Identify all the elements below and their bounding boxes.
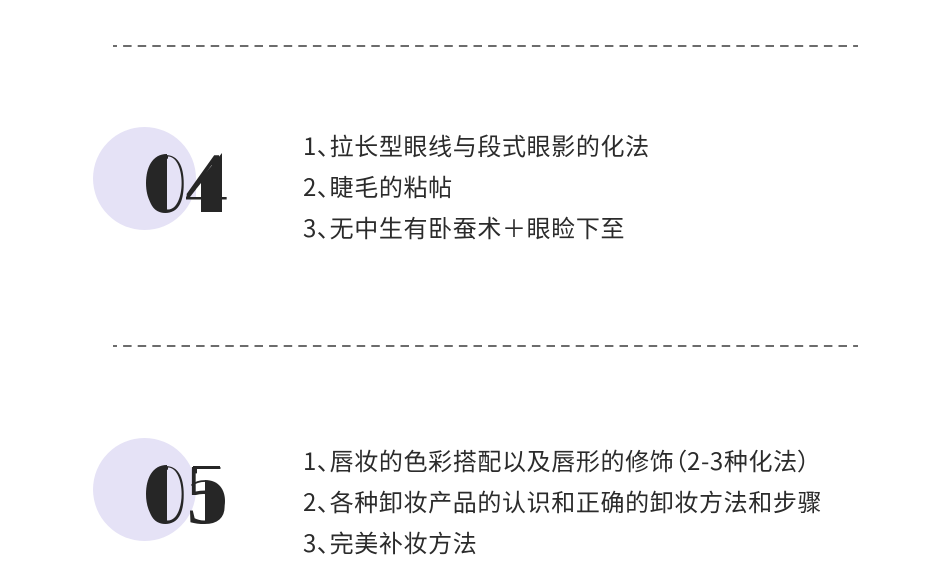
list 05: 3、完美补妆方法 [303, 524, 477, 559]
list 04: 3、无中生有卧蚕术＋眼睑下至 [303, 209, 625, 244]
list 04: 1、拉长型眼线与段式眼影的化法 [303, 127, 650, 162]
circle 04 [93, 127, 196, 230]
list 04 [303, 127, 650, 244]
number 04: 0 [144, 135, 187, 231]
section 04 [93, 127, 650, 244]
heavy stroke of 4 [186, 153, 228, 212]
half fill of zero 04 [146, 154, 167, 212]
number 05 [144, 446, 228, 542]
number 04: 4 [185, 135, 228, 231]
list 05: 2、各种卸妆产品的认识和正确的卸妆方法和步骤 [303, 483, 822, 518]
number 05: 5 [185, 446, 228, 542]
hollow half of zero 04 [168, 156, 182, 210]
hollow half of zero 05 [168, 468, 182, 520]
half fill of zero 05 [146, 465, 167, 523]
section 05 [93, 438, 822, 559]
list 05 [303, 442, 822, 559]
list 04: 2、睫毛的粘帖 [303, 168, 453, 203]
number 05: 0 [144, 446, 187, 542]
top bar and heavy bowl of 5 [192, 466, 227, 522]
number 04 [144, 135, 228, 231]
circle 05 [93, 438, 196, 541]
list 05: 1、唇妆的色彩搭配以及唇形的修饰（2-3种化法） [303, 442, 810, 477]
